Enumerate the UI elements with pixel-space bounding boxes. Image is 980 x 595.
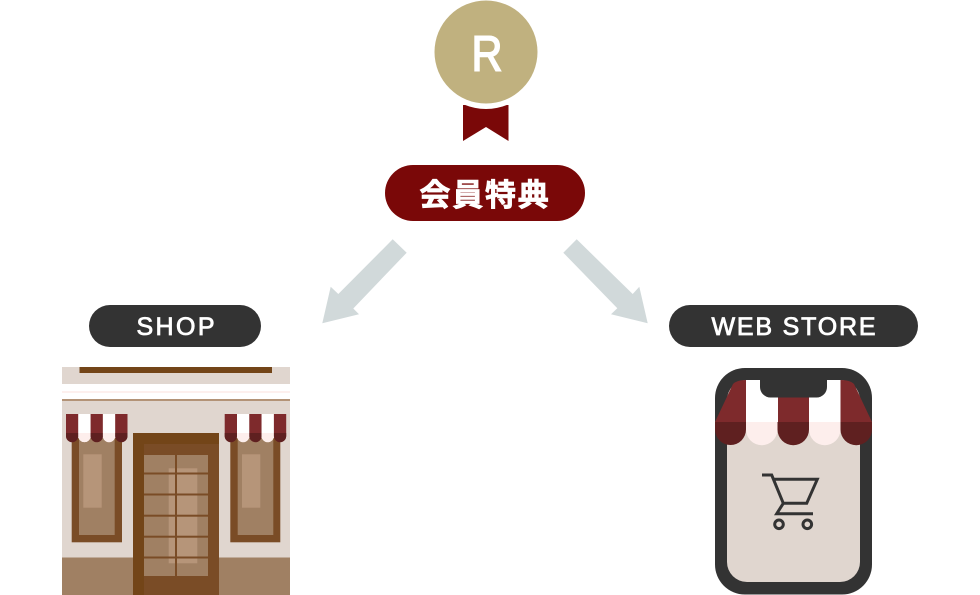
right awning bbox=[225, 414, 286, 442]
label: SHOP bbox=[89, 305, 261, 347]
shop wall bbox=[62, 401, 290, 558]
arrow: to web store bbox=[563, 239, 648, 323]
phone awning bbox=[715, 380, 872, 445]
left window bbox=[72, 438, 122, 542]
icon: medal bbox=[429, 0, 543, 141]
badge: member benefits: 会員特典 bbox=[419, 170, 551, 215]
label: WEB STORE bbox=[669, 305, 918, 347]
right window bbox=[230, 438, 280, 542]
icon: shopping cart bbox=[762, 475, 817, 529]
label: SHOP: SHOP bbox=[136, 313, 214, 341]
badge: member benefits bbox=[385, 165, 585, 221]
medal letter R: R bbox=[472, 26, 502, 82]
label: WEB STORE: WEB STORE bbox=[712, 313, 876, 341]
phone screen bbox=[727, 380, 860, 582]
phone body bbox=[715, 368, 872, 594]
shop base bbox=[62, 558, 290, 595]
arrow: to shop bbox=[322, 239, 407, 323]
left awning bbox=[66, 414, 128, 442]
shop fascia bbox=[62, 367, 290, 384]
medal ribbon bbox=[463, 105, 508, 141]
illustration: shop building bbox=[62, 367, 290, 595]
medal disc bbox=[434, 0, 538, 104]
illustration: smartphone store bbox=[715, 368, 872, 594]
shop door bbox=[133, 433, 219, 595]
phone notch bbox=[760, 380, 827, 398]
